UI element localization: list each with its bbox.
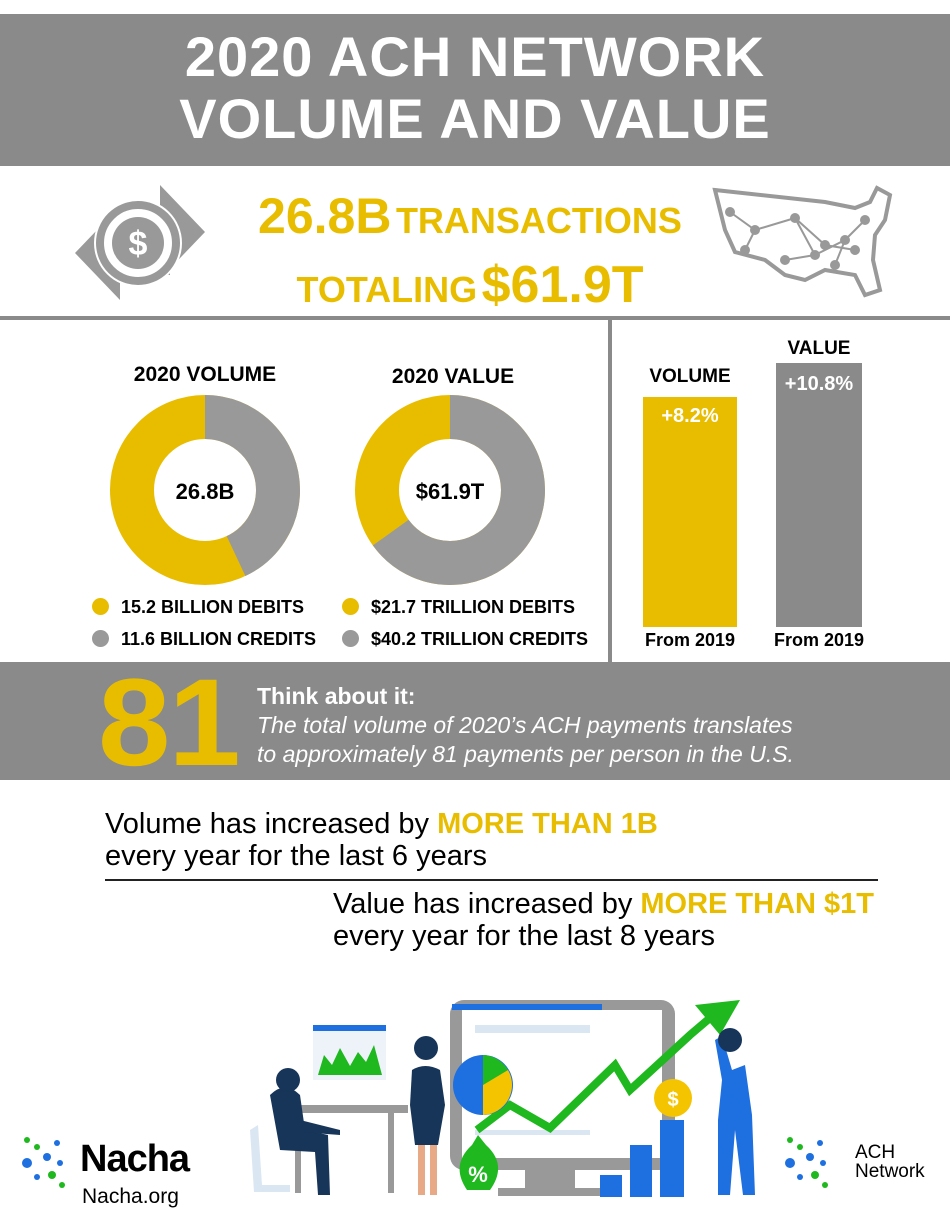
dividers <box>0 316 950 320</box>
bar: value: From 2019 <box>774 630 864 650</box>
text: volume increase: Volume has increased by MORE THAN 1B <box>105 808 658 840</box>
headline stat: TOTALING $61.9T <box>296 256 644 314</box>
callout text: Think about it: <box>257 683 415 709</box>
bar: volume: VOLUME <box>649 366 731 387</box>
icon: exchange arrows with dollar: $ <box>129 225 148 263</box>
logo: Nacha: Nacha.org <box>82 1185 179 1208</box>
headline stat: 26.8B TRANSACTIONS <box>258 188 682 244</box>
title: 2020 ACH NETWORK <box>185 25 765 88</box>
icon: exchange arrows with dollar <box>75 185 205 300</box>
panel: donut charts <box>92 363 588 649</box>
text: value increase: Value has increased by MORE THAN $1T <box>333 888 874 920</box>
heading: 2020 value: 2020 VALUE <box>392 365 514 388</box>
illustration: business team with growth chart: $ <box>667 1089 679 1111</box>
bar: value <box>774 338 864 650</box>
heading: 2020 volume: 2020 VOLUME <box>134 363 276 386</box>
legend: volume: 15.2 BILLION DEBITS <box>121 597 304 617</box>
logo: ACH Network <box>785 1137 925 1188</box>
bar: value: +10.8% <box>785 373 853 395</box>
logo: ACH Network: ACH <box>855 1142 895 1163</box>
callout text <box>257 683 794 767</box>
donut: value <box>355 395 545 585</box>
panel: growth bars <box>643 338 864 650</box>
title <box>179 25 771 150</box>
bar: volume: +8.2% <box>661 405 719 427</box>
illustration: business team with growth chart <box>250 1000 755 1197</box>
legend: volume: 11.6 BILLION CREDITS <box>121 629 316 649</box>
legend: volume <box>92 597 316 649</box>
icon: US map network <box>712 185 892 298</box>
donut: value: $61.9T <box>416 479 485 504</box>
text: value increase: every year for the last 8 years <box>333 920 715 952</box>
callout text: The total volume of 2020’s ACH payments translates <box>257 712 793 738</box>
bar: value: VALUE <box>788 338 850 359</box>
logo: Nacha: Nacha <box>80 1138 189 1180</box>
text: value increase <box>333 888 874 952</box>
bar: volume <box>643 366 737 650</box>
logo: ACH Network: Network <box>855 1161 925 1182</box>
legend: value: $40.2 TRILLION CREDITS <box>371 629 588 649</box>
illustration: business team with growth chart: % <box>468 1162 488 1187</box>
donut: volume: 26.8B <box>176 479 234 504</box>
big number 81: 81 <box>98 654 239 792</box>
logo: Nacha <box>22 1137 190 1208</box>
headline stat <box>258 188 682 314</box>
donut: volume <box>110 395 300 585</box>
callout text: to approximately 81 payments per person in the U.S. <box>257 741 794 767</box>
band: think about it <box>0 662 950 780</box>
legend: value: $21.7 TRILLION DEBITS <box>371 597 575 617</box>
bar: volume: From 2019 <box>645 630 735 650</box>
legend: value <box>342 597 588 649</box>
text: volume increase <box>105 808 658 872</box>
text: volume increase: every year for the last 6 years <box>105 840 487 872</box>
header band <box>0 14 950 166</box>
title: VOLUME AND VALUE <box>179 87 771 150</box>
